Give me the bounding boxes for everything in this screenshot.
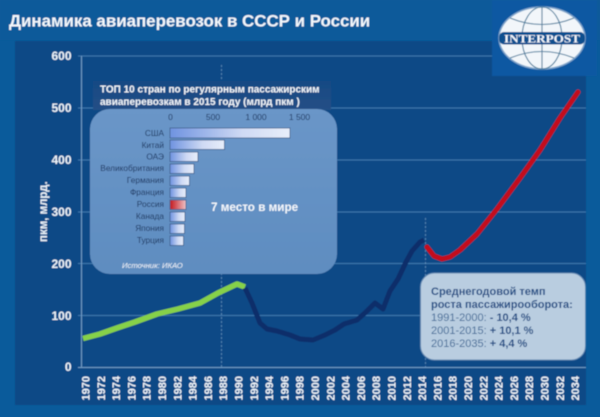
x axis year labels: 1984 xyxy=(188,375,200,400)
x axis year labels: 2032 xyxy=(555,376,567,400)
rank callout: 7 место в мире xyxy=(211,201,299,214)
x axis year labels: 2030 xyxy=(540,376,552,400)
x axis year labels: 1992 xyxy=(249,376,261,400)
x axis year labels: 2002 xyxy=(325,376,337,400)
x axis year labels: 2016 xyxy=(432,376,444,400)
y axis labels: 0 xyxy=(65,360,72,374)
bar chart country labels: Россия xyxy=(137,199,164,209)
x axis year labels: 2010 xyxy=(386,376,398,400)
y axis title: пкм, млрд. xyxy=(38,181,50,242)
callout: average annual growth: 2001-2015: + 10,1 % xyxy=(431,325,534,337)
x axis year labels: 1988 xyxy=(218,376,230,400)
x axis year labels: 1998 xyxy=(295,376,307,400)
x axis year labels: 1990 xyxy=(234,376,246,400)
bar chart axis labels: 500 xyxy=(206,112,220,122)
logo: Interpost: INTERPOST xyxy=(504,34,580,46)
x axis year labels: 2022 xyxy=(478,376,490,400)
x axis year labels: 2018 xyxy=(448,376,460,400)
x axis year labels: 2012 xyxy=(402,376,414,400)
line: USSR growth 1970-1990 xyxy=(83,284,245,338)
x axis year labels: 1994 xyxy=(264,375,276,400)
bar chart country labels: ОАЭ xyxy=(146,152,164,162)
bar chart country labels: США xyxy=(145,128,164,138)
x axis year labels: 1982 xyxy=(172,376,184,400)
inset header xyxy=(93,81,331,110)
x axis year labels: 2008 xyxy=(371,376,383,400)
y axis labels: 200 xyxy=(51,257,72,271)
bar chart country labels: Китай xyxy=(142,140,164,150)
logo: Interpost xyxy=(492,0,597,76)
line: decline and recovery 1991-2014 xyxy=(245,240,424,340)
x axis year labels: 1996 xyxy=(279,376,291,400)
y axis labels: 100 xyxy=(51,309,72,323)
inset header: ТОП 10 стран по регулярным пассажирским xyxy=(100,84,320,96)
x axis year labels: 1972 xyxy=(96,376,108,400)
x axis year labels: 2020 xyxy=(463,376,475,400)
bar chart axis labels: 1 000 xyxy=(245,112,267,122)
bar chart country labels: Франция xyxy=(130,187,164,197)
x axis year labels: 2024 xyxy=(494,375,506,400)
callout: average annual growth: Среднегодовой темп xyxy=(431,286,546,298)
y axis labels xyxy=(51,49,72,374)
bar chart country labels: Великобритания xyxy=(100,163,164,173)
grid lines xyxy=(78,56,586,316)
y axis labels: 600 xyxy=(51,49,72,63)
bar chart country labels: Германия xyxy=(127,175,164,185)
x axis year labels: 2004 xyxy=(341,375,353,400)
x axis year labels: 1978 xyxy=(142,376,154,400)
bar chart country labels: Канада xyxy=(136,211,164,221)
bar chart country labels xyxy=(100,128,164,245)
callout: average annual growth: роста пассажирооборота: xyxy=(431,299,573,311)
x axis year labels: 2034 xyxy=(570,375,582,400)
x axis year labels: 2028 xyxy=(524,376,536,400)
x axis year labels: 1976 xyxy=(126,376,138,400)
x axis year labels: 2014 xyxy=(417,375,429,400)
x axis year labels: 2000 xyxy=(310,376,322,400)
x axis year labels: 1980 xyxy=(157,376,169,400)
callout: average annual growth: 1991-2000: - 10,4 % xyxy=(431,312,531,324)
callout: average annual growth: 2016-2035: + 4,4 % xyxy=(431,338,528,350)
bar chart axis labels: 1 500 xyxy=(289,112,310,122)
bar chart axis labels xyxy=(168,112,310,122)
y axis labels: 400 xyxy=(51,153,72,167)
title: Динамика авиаперевозок в СССР и России xyxy=(9,12,370,30)
callout: average annual growth xyxy=(420,273,586,360)
bar chart country labels: Япония xyxy=(135,223,164,233)
line: forecast 2015-2035 xyxy=(427,92,578,259)
x axis year labels: 2026 xyxy=(509,376,521,400)
panel: top 10 countries xyxy=(90,81,337,274)
source note: Источник: ИКАО xyxy=(122,261,183,270)
x axis year labels: 1986 xyxy=(203,376,215,400)
x axis year labels: 2006 xyxy=(356,376,368,400)
x axis year labels: 1974 xyxy=(111,375,123,400)
bar chart axis labels: 0 xyxy=(168,112,173,122)
y axis labels: 300 xyxy=(51,205,72,219)
x axis year labels xyxy=(80,375,582,400)
bar chart country labels: Турция xyxy=(137,235,164,245)
y axis and x axis xyxy=(78,56,586,368)
y axis labels: 500 xyxy=(51,101,72,115)
inset background xyxy=(90,109,337,274)
inset header: авиаперевозкам в 2015 году (млрд пкм ) xyxy=(100,97,300,108)
bar chart xyxy=(170,128,290,246)
x axis year labels: 1970 xyxy=(80,376,92,400)
